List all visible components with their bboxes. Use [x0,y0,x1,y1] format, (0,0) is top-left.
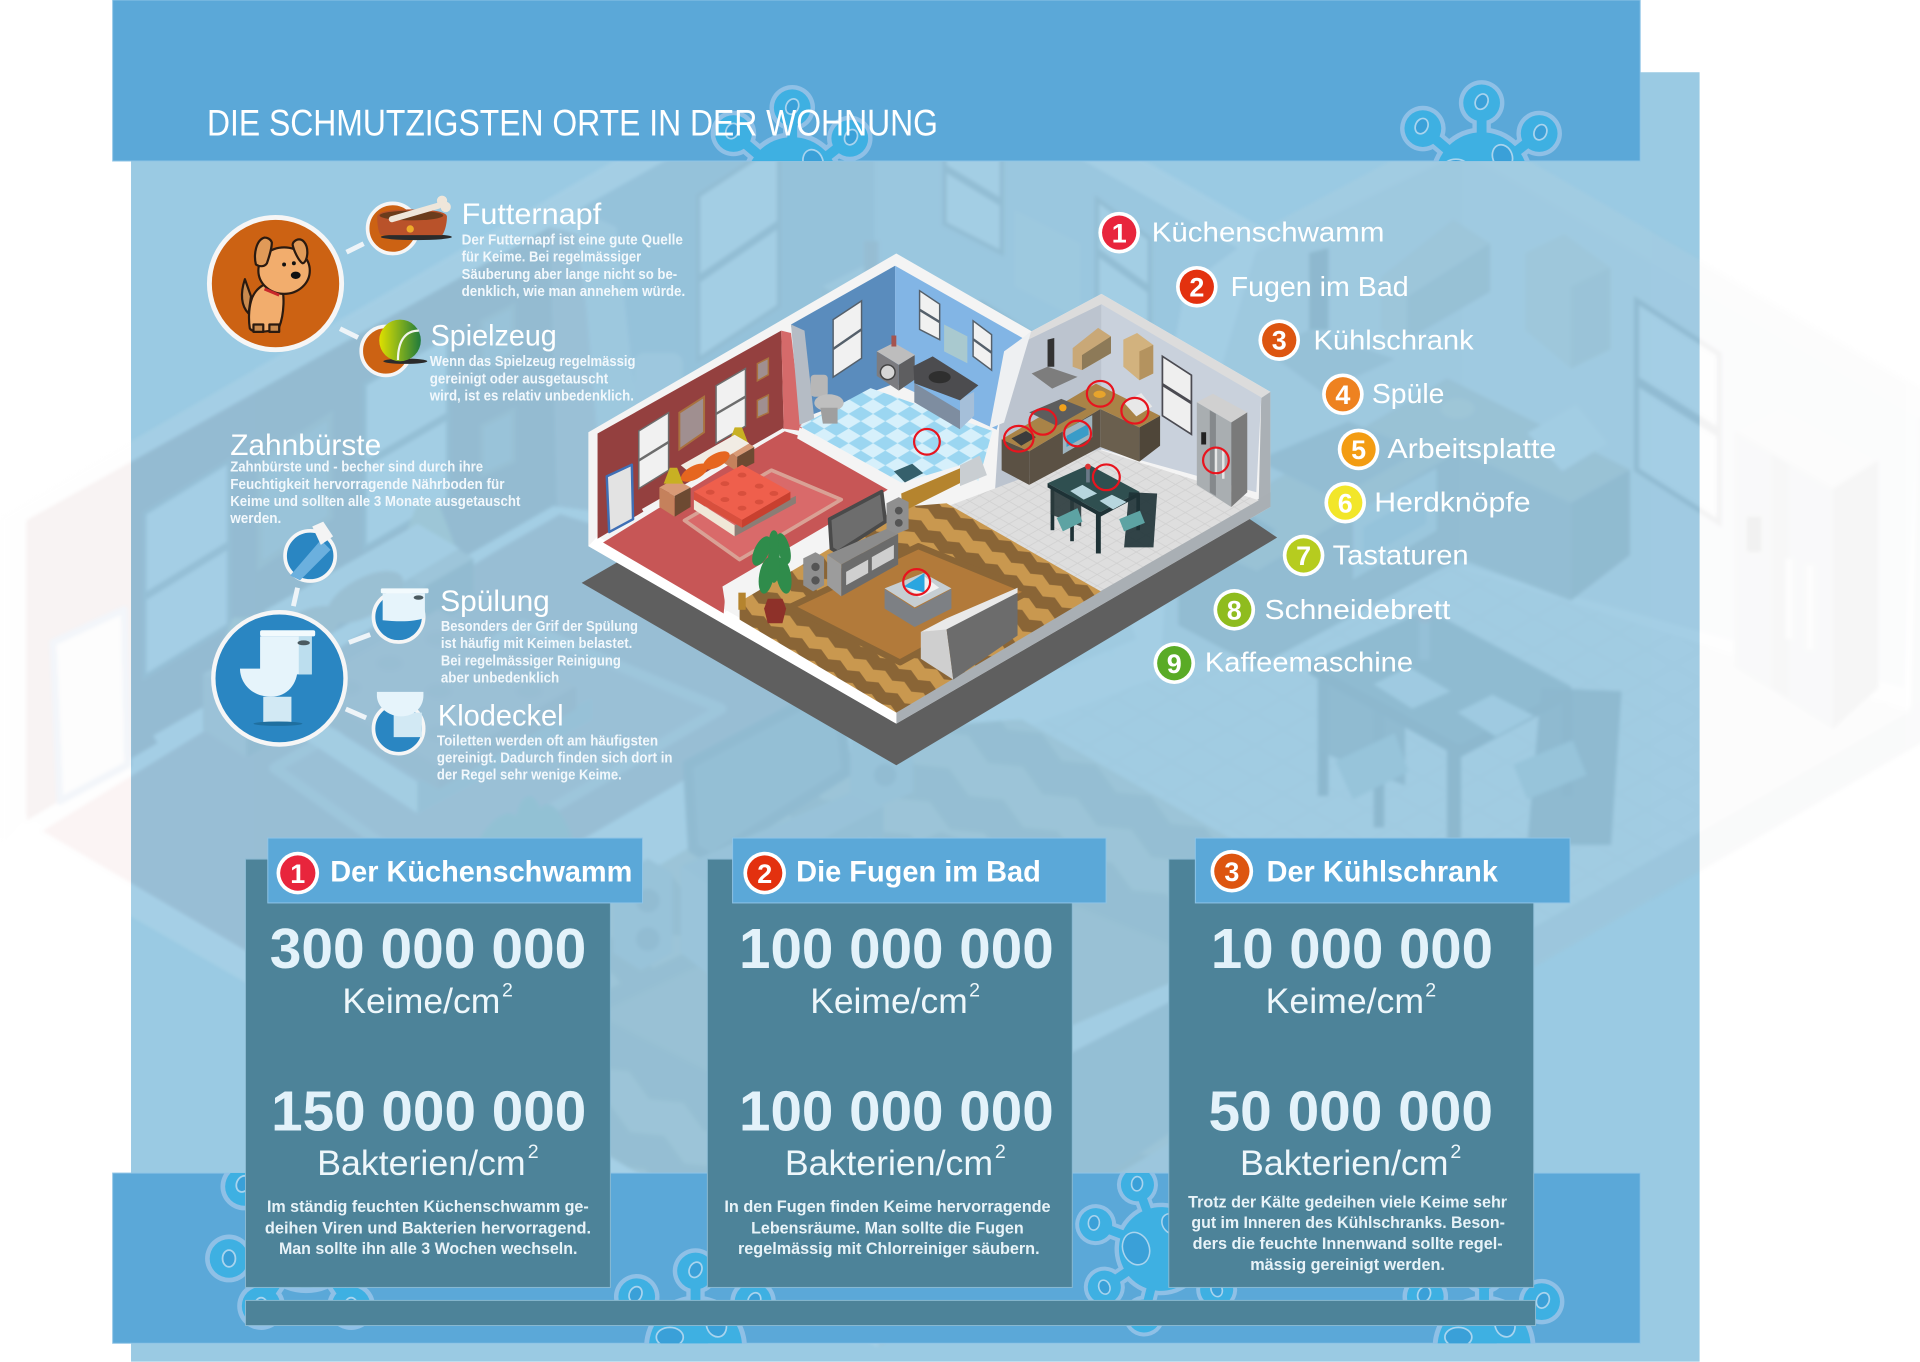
legend item 4: 4 [1335,380,1350,410]
icon: toilet large [213,612,370,744]
text: Klodeckel [437,733,672,783]
tab heading 1: Der Küchenschwamm [330,856,632,889]
text: Spülung: ist häufig mit Keimen belastet. [441,636,632,652]
card 2: Fugen im Bad [707,838,1106,1287]
text: Zahnbürste [229,459,521,527]
text: card 3: ders die feuchte Innenwand sollte regel- [1193,1234,1503,1253]
germs in footer [205,1173,1564,1344]
heading: Spielzeug: Spielzeug [431,319,557,352]
stat: Keime: Keime/cm [1266,981,1424,1021]
text: Spülung: Besonders der Grif der Spülung [441,619,638,635]
legend item 7: 7 [1296,541,1311,571]
stat: Keime [270,917,586,1021]
legend item 2: Fugen im Bad [1231,271,1409,302]
text: Spülung: aber unbedenklich [441,670,559,686]
card 1: Küchenschwamm [246,838,642,1287]
legend item 9 [1153,642,1413,684]
text: card 1 [265,1197,591,1258]
text: Futternapf: Säuberung aber lange nicht so be- [462,267,677,283]
text: Klodeckel: der Regel sehr wenige Keime. [437,767,622,783]
legend item 9: 9 [1167,649,1182,679]
text: Futternapf: Der Futternapf ist eine gute Quelle [462,232,683,248]
tab heading 2 [733,838,1106,903]
tab heading 3: Der Kühlschrank [1267,856,1499,889]
bottom strip [246,1300,1536,1326]
stat: Bakterien: 2 [1450,1141,1461,1163]
legend item 2: 2 [1189,272,1204,302]
legend item 1: 1 [1112,218,1127,248]
heading: Spülung: Spülung [440,585,550,618]
tab heading 1 [268,838,642,903]
text: Spülung [441,619,638,686]
stat: Bakterien [1209,1079,1493,1183]
stat: Bakterien: 2 [995,1141,1006,1163]
text: card 1: deihen Viren und Bakterien hervorragend. [265,1219,591,1238]
text: card 2: Lebensräume. Man sollte die Fugen [751,1219,1024,1238]
heading: Zahnbürste: Zahnbürste [230,429,381,462]
legend item 4: Spüle [1372,378,1444,409]
legend item 8: 8 [1227,596,1242,626]
stat: Keime [739,917,1054,1021]
legend item 4 [1322,373,1444,415]
legend item 1 [1098,212,1384,253]
text: card 3: Trotz der Kälte gedeihen viele Keime sehr [1188,1192,1508,1211]
stat: Bakterien: 150 000 000 [271,1079,586,1142]
legend item 8 [1213,589,1451,631]
tab heading 3: 3 [1224,857,1239,887]
stat: Bakterien: 50 000 000 [1209,1079,1493,1142]
footer band [112,1172,1640,1344]
stat: Bakterien: Bakterien/cm [785,1143,993,1183]
text: card 1: Im ständig feuchten Küchenschwamm ge- [267,1197,589,1216]
text: Futternapf: für Keime. Bei regelmässiger [462,250,642,266]
stat: Bakterien: Bakterien/cm [317,1143,526,1183]
icon: tennis ball [361,320,427,375]
legend item 3 [1258,319,1475,361]
text: card 2: regelmässig mit Chlorreiniger säubern. [738,1239,1040,1258]
tab heading 2: Die Fugen im Bad [796,856,1041,889]
legend item 2 [1176,266,1409,308]
text: card 3: mässig gereinigt werden. [1250,1255,1445,1274]
stat: Keime: 100 000 000 [739,917,1054,980]
tab heading 1: 1 [290,859,305,889]
legend item 8: Schneidebrett [1265,594,1451,625]
dark base under apartment [582,502,1277,765]
tab heading 2: 2 [757,859,772,889]
stat: Bakterien: 100 000 000 [739,1079,1054,1142]
panel: light blue background [131,72,1700,1362]
faded house inside panel [131,162,1700,1172]
legend item 1: Küchenschwamm [1152,217,1384,248]
legend item 6: Herdknöpfe [1374,486,1531,517]
stat: Bakterien [739,1079,1054,1183]
text: Zahnbürste: Keime und sollten alle 3 Monate ausgetauscht [230,494,521,510]
icon group: dog [209,217,364,350]
text: Spülung: Bei regelmässiger Reinigung [441,653,621,669]
stat: Keime: 2 [502,979,513,1001]
legend: numbered places [1098,212,1556,684]
legend item 5 [1338,429,1556,470]
text: Zahnbürste: werden. [229,511,281,527]
heading: Klodeckel: Klodeckel [438,699,564,732]
title: DIE SCHMUTZIGSTEN ORTE IN DER WOHNUNG [207,102,938,143]
text: Zahnbürste: Feuchtigkeit hervorragende Nährboden für [230,477,505,493]
text: card 3: gut im Inneren des Kühlschranks. Beson- [1191,1213,1505,1232]
icon: toothbrush [285,522,335,606]
red marker circles on apartment [903,381,1229,595]
text: Spielzeug: gereinigt oder ausgetauscht [430,371,608,387]
text: Klodeckel: Toiletten werden oft am häufigsten [437,733,658,749]
text: Spielzeug: wird, ist es relativ unbedenklich. [429,388,634,404]
legend item 5: 5 [1351,435,1366,465]
icon: germ behind title [710,85,872,161]
legend item 6: 6 [1338,488,1353,518]
stat: Keime: Keime/cm [342,981,500,1021]
icon: dog [242,238,310,332]
header band [112,0,1641,162]
text: Spielzeug [429,354,636,404]
stat: Keime [1211,917,1493,1021]
stat: Keime: 10 000 000 [1211,917,1493,980]
text: Klodeckel: gereinigt. Dadurch finden sich dort in [437,750,672,766]
icon: toilet lid [373,692,424,754]
icon: germ right [1400,80,1562,161]
text: card 3 [1188,1192,1508,1274]
legend item 9: Kaffeemaschine [1205,647,1413,678]
heading: Futternapf: Futternapf [462,198,602,231]
legend item 6 [1324,482,1531,523]
isometric apartment illustration [588,253,1270,724]
text: Zahnbürste: Zahnbürste und - becher sind durch ihre [230,459,483,475]
stat: Keime: 2 [969,979,980,1001]
legend item 3: Kühlschrank [1314,324,1475,355]
stat: Keime: 2 [1425,979,1436,1001]
stat: Keime: 300 000 000 [270,917,586,980]
text: card 2 [724,1197,1051,1258]
stat: Bakterien: 2 [528,1141,539,1163]
stat: Keime: Keime/cm [810,981,968,1021]
text: Futternapf: denklich, wie man annehem würde. [462,284,685,300]
tab heading 3 [1195,838,1570,903]
legend item 7 [1283,535,1469,576]
text: card 2: In den Fugen finden Keime hervorragende [724,1197,1051,1216]
text: Futternapf [462,232,685,300]
card 3: Kühlschrank [1169,838,1570,1287]
legend item 3: 3 [1272,326,1287,356]
icon: flush [373,588,429,642]
legend item 5: Arbeitsplatte [1387,433,1556,464]
stat: Bakterien [271,1079,586,1183]
text: Spielzeug: Wenn das Spielzeug regelmässig [430,354,636,370]
stat: Bakterien: Bakterien/cm [1240,1143,1449,1183]
icon: food bowl [368,196,452,254]
faded background house [28,340,1876,882]
legend item 7: Tastaturen [1333,539,1469,570]
text: card 1: Man sollte ihn alle 3 Wochen wechseln. [279,1239,577,1258]
